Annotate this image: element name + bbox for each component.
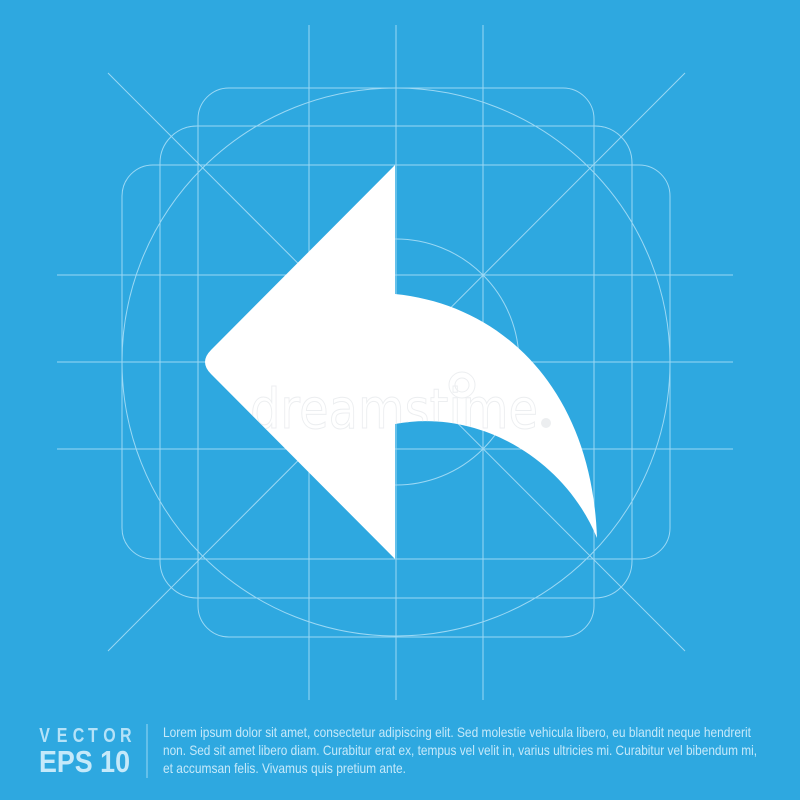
- footer: EPS 10 label: EPS 10: [39, 744, 130, 779]
- footer: description text: [163, 724, 757, 776]
- icon construction grid: [57, 25, 733, 700]
- footer divider: [146, 724, 148, 778]
- watermark: [252, 372, 551, 430]
- footer: vector label: VECTOR: [39, 724, 132, 746]
- watermark: dreamstime: [250, 377, 538, 441]
- footer: description text: et accumsan felis. Vivamus quis pretium ante.: [163, 760, 406, 776]
- icon: reply arrow: [205, 165, 597, 559]
